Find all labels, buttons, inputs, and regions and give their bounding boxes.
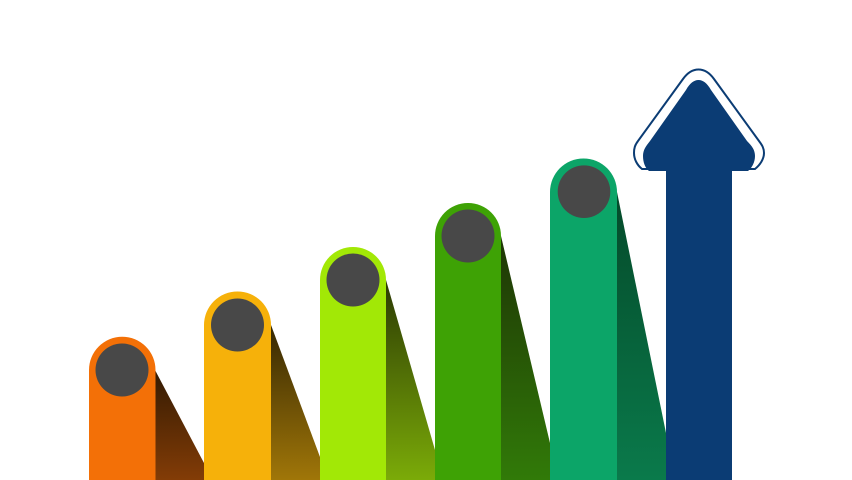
column: green (435, 203, 501, 480)
shadow: yellow bar (271, 325, 320, 480)
bar 2: yellow (204, 292, 320, 480)
bar 5: teal green (550, 158, 666, 480)
circle: lime bar marker (326, 254, 380, 306)
circle: green bar marker (442, 210, 494, 262)
shadow: green bar (501, 236, 550, 480)
shadow: teal bar (617, 192, 666, 480)
arrow: navy upward (634, 70, 764, 480)
shadow: orange bar (155, 370, 204, 480)
arrow outline (634, 70, 764, 169)
column: orange (89, 337, 156, 480)
circle: yellow bar marker (211, 298, 264, 352)
bar 3: lime (320, 247, 435, 480)
shadow: lime bar (386, 280, 435, 480)
circle: teal bar marker (558, 165, 610, 218)
arrow body (643, 80, 755, 480)
bar 4: green (435, 203, 550, 480)
column: yellow (204, 292, 271, 480)
circle: orange bar marker (96, 344, 148, 396)
column: teal (550, 158, 617, 480)
column: lime (320, 247, 386, 480)
bar 1: orange (89, 337, 204, 480)
